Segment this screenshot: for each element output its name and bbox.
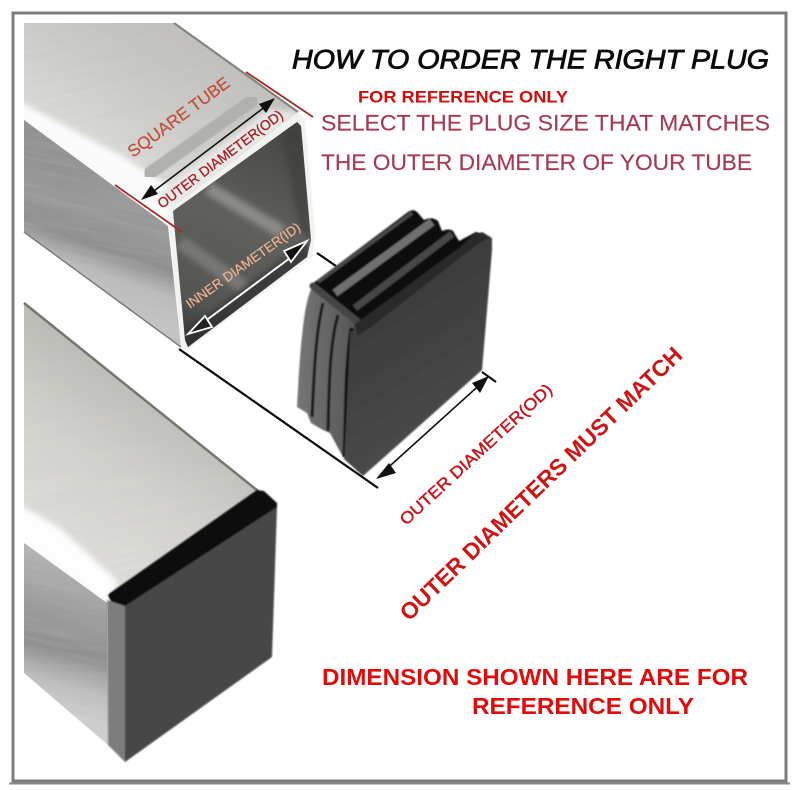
plug front face	[344, 232, 492, 476]
label: inner diameter: INNER DIAMETER(ID)	[183, 220, 303, 311]
black guide lines between tube and plug	[179, 253, 378, 488]
tube top face	[24, 22, 299, 226]
end cap	[107, 490, 277, 762]
disclaimer	[322, 664, 748, 719]
capped tube side face	[24, 543, 108, 745]
red pointer lines	[115, 72, 313, 232]
callout: outer diameters must match: OUTER DIAMETERS MUST MATCH	[394, 342, 687, 626]
plug	[297, 210, 492, 476]
instruction line 1: SELECT THE PLUG SIZE THAT MATCHES	[321, 110, 770, 136]
arrow: outer diameter on tube	[141, 98, 275, 200]
capped tube top face	[23, 302, 259, 602]
instruction line 2: THE OUTER DIAMETER OF YOUR TUBE	[321, 150, 752, 175]
note: for reference only: FOR REFERENCE ONLY	[358, 88, 569, 106]
arrow: inner diameter	[188, 241, 307, 334]
title: HOW TO ORDER THE RIGHT PLUG	[292, 44, 769, 74]
label: square tube: SQUARE TUBE	[124, 73, 233, 161]
tube side face	[24, 120, 182, 348]
label: outer diameter on tube: OUTER DIAMETER(OD)	[154, 107, 286, 211]
plug side ribs	[297, 288, 362, 457]
label: outer diameter on plug: OUTER DIAMETER(OD)	[397, 381, 556, 529]
capped tube	[23, 302, 278, 763]
plug top ribs	[312, 210, 490, 326]
disclaimer: REFERENCE ONLY	[472, 693, 694, 719]
tube open end	[168, 112, 315, 352]
arrow: outer diameter on plug	[376, 372, 496, 479]
disclaimer: DIMENSION SHOWN HERE ARE FOR	[322, 664, 748, 690]
square tube with open end	[24, 22, 315, 350]
